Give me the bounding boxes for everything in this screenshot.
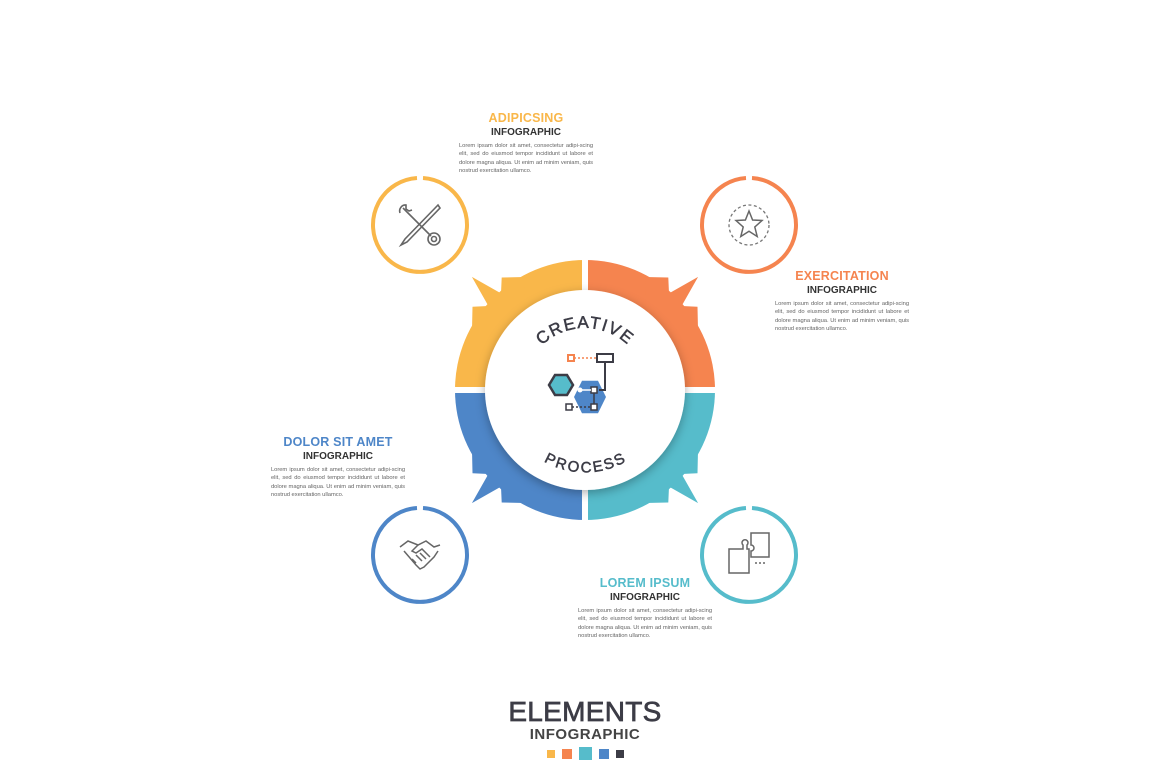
footer logo: ELEMENTS xyxy=(508,696,662,727)
text block: exercitation: Lorem ipsum dolor sit amet, consectetur adipi-scing elit, sed do eiusmod tempor incididunt ut labore et dolore magna aliqua. Ut enim ad minim veniam, quis nostrud exercitation ullamco. xyxy=(775,301,909,332)
text block: adipicsing xyxy=(459,111,593,174)
text block: lorem ipsum: Lorem ipsum dolor sit amet, consectetur adipi-scing elit, sed do eiusmod tempor incididunt ut labore et dolore magna aliqua. Ut enim ad minim veniam, quis nostrud exercitation ullamco. xyxy=(578,608,712,639)
segment: blue xyxy=(455,390,585,520)
circle: star (orange) xyxy=(702,178,796,272)
segment: teal xyxy=(585,390,715,520)
text block: adipicsing: ADIPICSING xyxy=(489,111,563,125)
text block: dolor sit amet: Lorem ipsum dolor sit amet, consectetur adipi-scing elit, sed do eiusmod tempor incididunt ut labore et dolore magna aliqua. Ut enim ad minim veniam, quis nostrud exercitation ullamco. xyxy=(271,467,405,498)
center circle: PROCESS xyxy=(544,452,625,473)
text block: exercitation xyxy=(775,269,909,332)
icon: process xyxy=(549,354,613,413)
text block: dolor sit amet xyxy=(271,435,405,498)
text block: adipicsing: INFOGRAPHIC xyxy=(491,127,561,138)
circle: handshake (blue) xyxy=(373,508,467,602)
text block: dolor sit amet: DOLOR SIT AMET xyxy=(283,435,393,449)
segment: orange xyxy=(585,260,715,390)
segment: yellow xyxy=(455,260,585,390)
text block: lorem ipsum: LOREM IPSUM xyxy=(600,576,690,590)
circle: tools (yellow) xyxy=(373,178,467,272)
central ring xyxy=(455,260,715,520)
text block: adipicsing: Lorem ipsam dolor sit amet, consectetur adipi-scing elit, sed do eiusmod tempor incididunt ut labore et dolore magna aliqua. Ut enim ad minim veniam, quis nostrud exercitation ullamco. xyxy=(459,143,593,174)
text block: lorem ipsum xyxy=(578,576,712,639)
center circle xyxy=(479,287,691,499)
circle: puzzle (teal) xyxy=(702,508,796,602)
text block: dolor sit amet: INFOGRAPHIC xyxy=(303,451,373,462)
footer logo: INFOGRAPHIC xyxy=(530,726,640,743)
text block: exercitation: INFOGRAPHIC xyxy=(807,285,877,296)
color squares xyxy=(547,747,624,760)
center circle: CREATIVE xyxy=(536,316,634,344)
text block: exercitation: EXERCITATION xyxy=(795,269,889,283)
footer logo xyxy=(508,696,662,760)
text block: lorem ipsum: INFOGRAPHIC xyxy=(610,592,680,603)
